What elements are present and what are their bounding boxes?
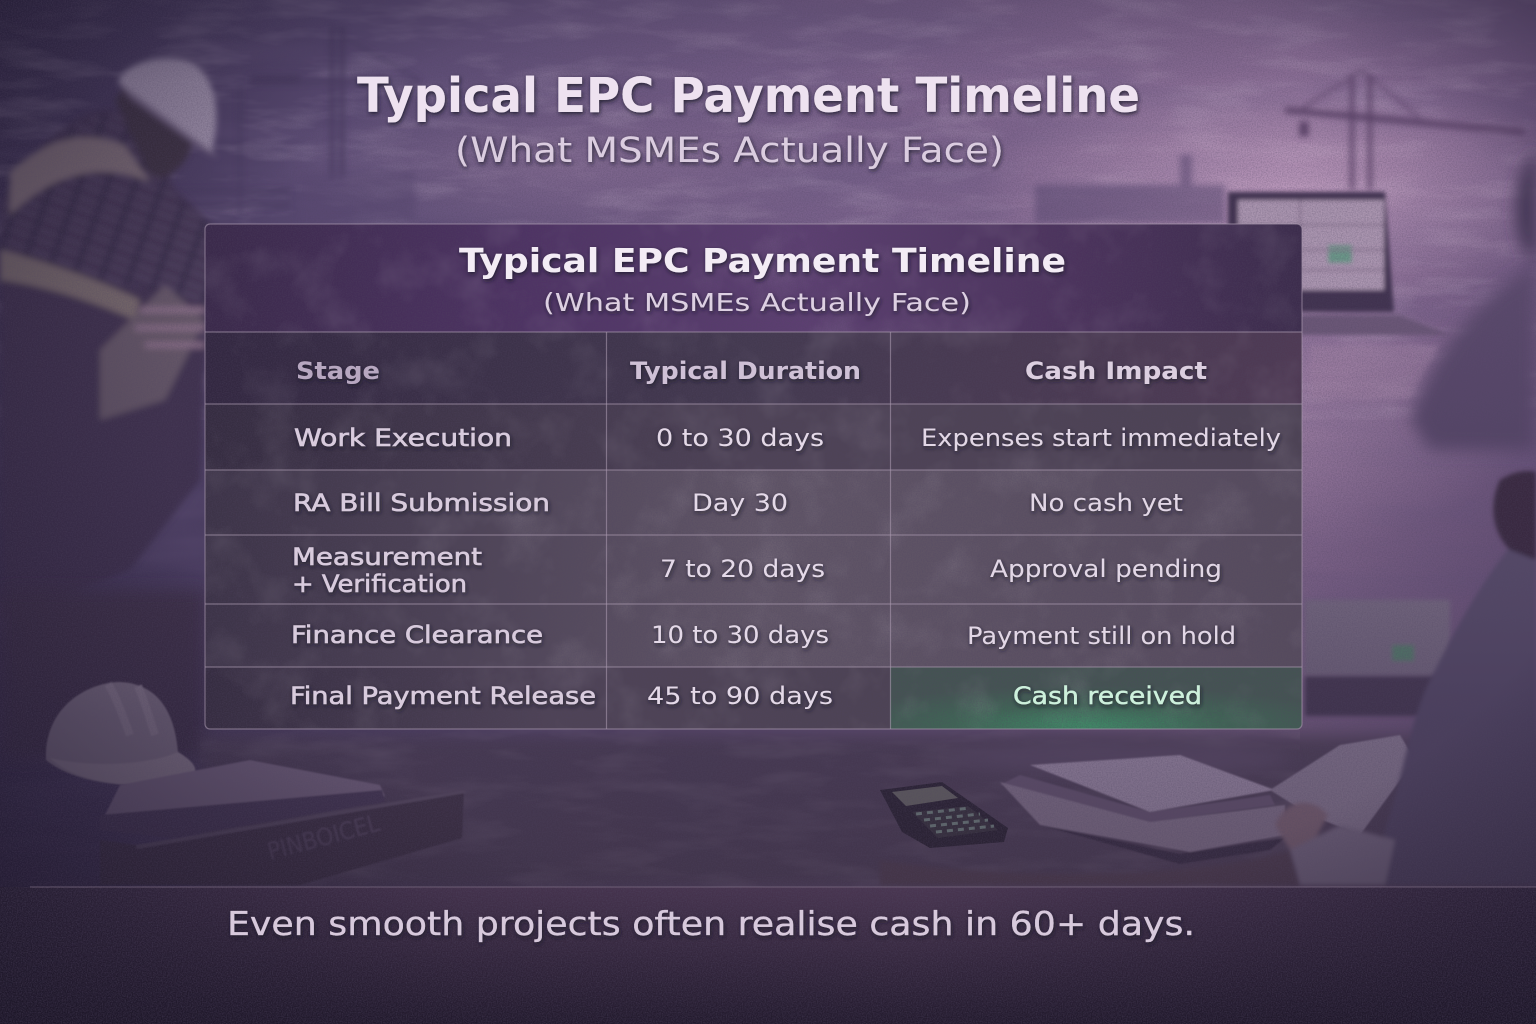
row: work execution: Work Execution [294, 424, 512, 452]
table header band: Typical EPC Payment Timeline [459, 241, 1066, 280]
row: final payment release: Final Payment Release [290, 682, 596, 710]
row: work execution: 0 to 30 days [656, 424, 824, 452]
table header band: (What MSMEs Actually Face) [543, 288, 971, 317]
background: right crane [1285, 70, 1525, 190]
page title [357, 68, 1140, 171]
stack of papers and box file: PINBOICEL [264, 809, 383, 866]
row: measurement and verification [205, 535, 1302, 604]
background: second monitor [1305, 600, 1450, 716]
row: finance clearance: Finance Clearance [291, 621, 543, 649]
background: right person shoulder [1410, 150, 1536, 450]
row: finance clearance: Payment still on hold [967, 622, 1236, 650]
row: finance clearance [205, 604, 1302, 667]
row: RA bill submission: No cash yet [1029, 489, 1183, 517]
subtitle: (What MSMEs Actually Face) [455, 131, 1004, 171]
footer band [0, 887, 1536, 1024]
seated person with hand [1275, 471, 1536, 885]
stack of papers and box file [100, 760, 466, 885]
row: RA bill submission: RA Bill Submission [293, 489, 550, 517]
background: top laptop [1228, 192, 1450, 400]
background: desk surface [200, 735, 1536, 890]
background: worker [0, 58, 242, 620]
row: finance clearance: 10 to 30 days [651, 621, 829, 649]
table header band [205, 224, 1302, 332]
column headers: Stage [296, 357, 380, 385]
row: measurement and verification: 7 to 20 days [660, 555, 825, 583]
row: RA bill submission [205, 470, 1302, 535]
row: final payment release: 45 to 90 days [647, 682, 833, 710]
footer takeaway text: Even smooth projects often realise cash in 60+ days. [227, 904, 1195, 943]
column headers: Cash Impact [1025, 357, 1207, 385]
row: RA bill submission: Day 30 [692, 489, 788, 517]
row: measurement and verification: + Verification [292, 570, 467, 598]
panel: payment timeline table [205, 224, 1302, 729]
background: left crane [170, 25, 420, 215]
column headers: Typical Duration [630, 357, 861, 385]
background: ground shrubs [0, 590, 205, 760]
row: measurement and verification: Measurement [292, 543, 482, 571]
row: final payment release [205, 667, 1302, 729]
background: distant structures [300, 155, 1225, 223]
row: final payment release: Cash received [1013, 682, 1202, 710]
hard hat on files [46, 682, 195, 786]
column headers [205, 332, 1302, 404]
papers on desk [1000, 735, 1415, 864]
row: work execution [205, 404, 1302, 470]
main title: Typical EPC Payment Timeline [357, 68, 1140, 124]
row: measurement and verification: Approval pending [990, 555, 1222, 583]
calculator [880, 782, 1008, 848]
row: work execution: Expenses start immediately [921, 424, 1281, 452]
